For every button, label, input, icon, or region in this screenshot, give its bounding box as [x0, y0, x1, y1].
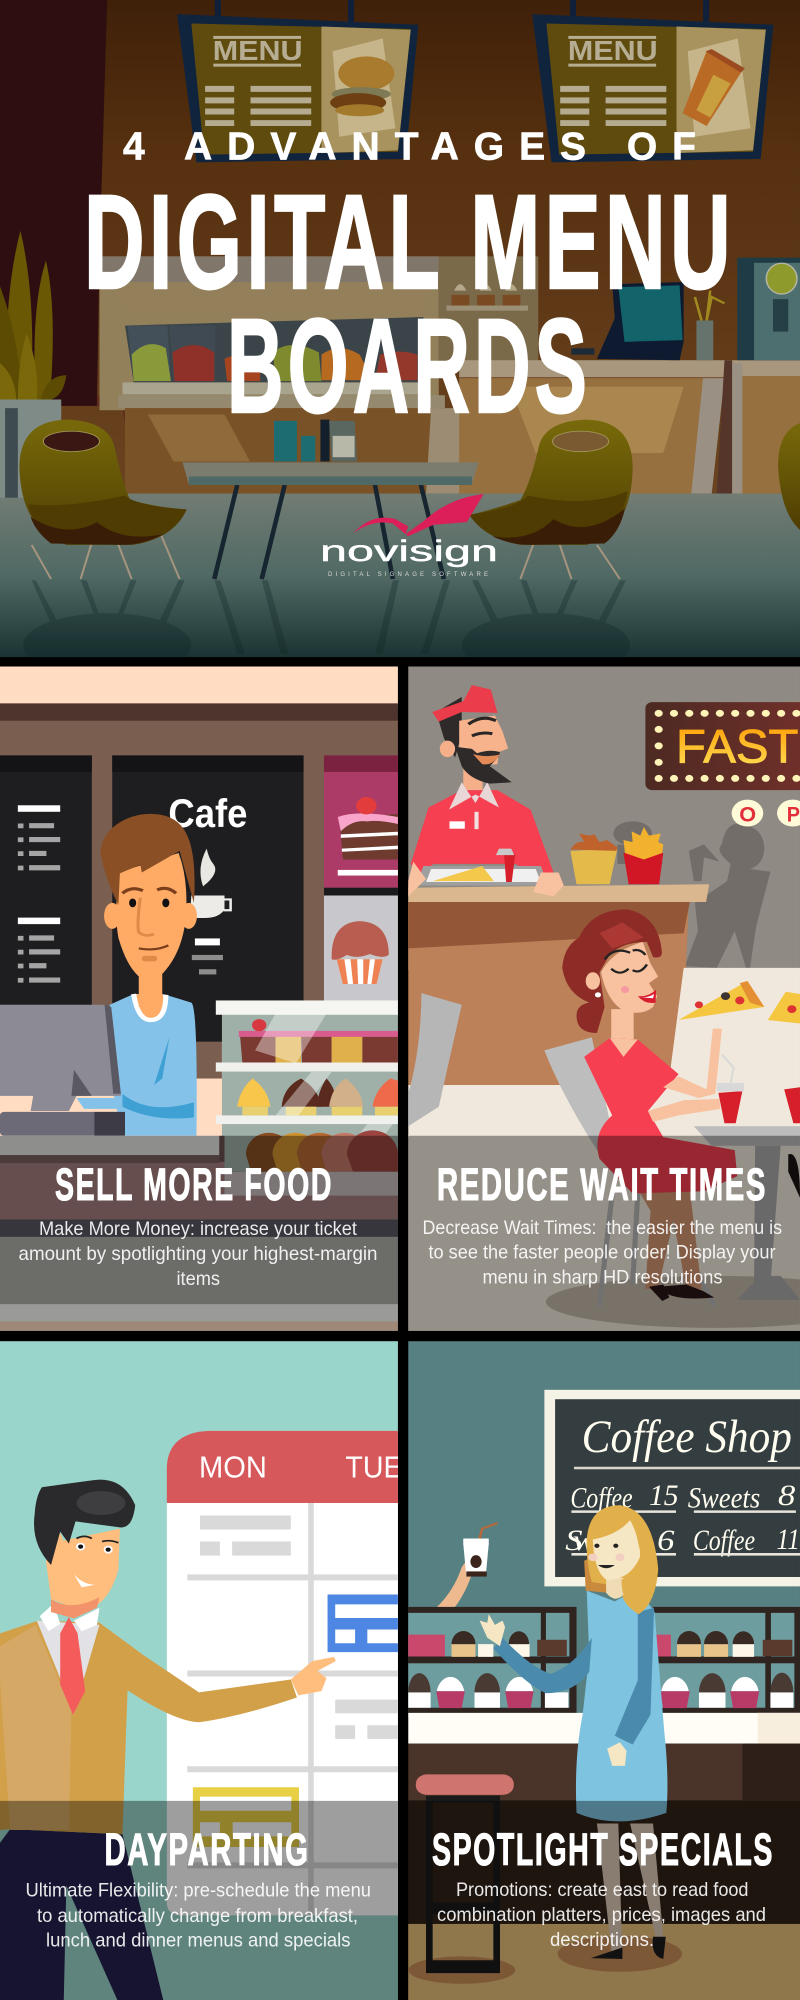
panel 4 body text: Promotions: create east to read food — [456, 1879, 748, 1901]
panel 4 wall — [408, 1341, 800, 1717]
panel 3 text backdrop — [0, 1801, 398, 2000]
panel: spotlight specials — [408, 1341, 800, 2000]
hero drink machine — [737, 258, 800, 360]
panel: dayparting — [0, 1341, 403, 2000]
panel 3 calendar — [167, 1431, 403, 1915]
panel 2 text backdrop — [408, 1136, 800, 1331]
panel 2 chair — [544, 1037, 714, 1306]
panel 3 background — [0, 1341, 398, 2000]
panel 1 left chalkboard — [0, 755, 92, 1007]
panel: sell more food — [0, 667, 398, 1332]
panel 2 chicken bucket — [570, 833, 617, 884]
panel 4 coffee shop chalkboard: Coffee — [570, 1481, 633, 1514]
panel 1 center chalkboard — [112, 755, 304, 1042]
panel 4 counter — [408, 1713, 800, 2000]
panel 2 dining floor and table — [408, 968, 800, 1332]
panel 2 pizza slices — [679, 981, 800, 1023]
hero plant — [0, 231, 66, 498]
panel 4 coffee shop chalkboard: 8 — [778, 1479, 795, 1512]
panel 2 rear chair — [408, 993, 462, 1126]
hero right chair — [469, 420, 633, 579]
hero table — [183, 420, 479, 579]
panel 2 body text: to see the faster people order! Display your — [428, 1242, 776, 1264]
hero floor reflection — [24, 580, 630, 644]
panel 4 coffee shop chalkboard: Sw — [565, 1524, 597, 1556]
panel 4 coffee shop chalkboard: 15 — [649, 1479, 679, 1512]
hero menu board left — [177, 0, 418, 162]
panel 3 calendar: TUE — [345, 1450, 403, 1485]
hero subtitle: 4 ADVANTAGES OF — [123, 126, 696, 168]
panel 1 muffins row — [246, 1130, 398, 1172]
panel: reduce wait times — [408, 667, 800, 1332]
panel 1 body text: amount by spotlighting your highest-margin — [18, 1243, 378, 1265]
panel 3 heading: DAYPARTING — [104, 1824, 310, 1875]
panel 2 silhouette diners — [613, 821, 770, 968]
panel 1 ceiling and beam — [0, 667, 398, 1137]
hero logo wing — [353, 494, 484, 536]
panel 3 body text: Ultimate Flexibility: pre-schedule the menu — [26, 1880, 371, 1902]
panel 1 cashier — [77, 814, 197, 1136]
hero far right chair — [778, 423, 800, 530]
hero straws and cup — [695, 291, 724, 360]
panel 3 body text: to automatically change from breakfast, — [37, 1905, 358, 1927]
hero menu board left: MENU — [213, 37, 303, 67]
panel 1 body text — [18, 1218, 378, 1290]
panel 2 fast sign — [645, 702, 800, 827]
panel 4 text backdrop — [408, 1801, 800, 2000]
panel 2 body text — [422, 1217, 782, 1288]
hero wall — [0, 0, 800, 496]
panel 1 point of sale terminal — [0, 1005, 125, 1136]
hero counter — [97, 256, 538, 494]
panel 1 heading: SELL MORE FOOD — [55, 1159, 333, 1210]
panel 2 woman — [562, 909, 744, 1301]
panel 2 tray — [408, 849, 564, 896]
panel 4 coffee shop chalkboard — [544, 1390, 800, 1586]
panel 4 body text — [437, 1879, 766, 1951]
panel 1 body text: items — [176, 1268, 220, 1290]
hero register monitor — [571, 282, 684, 360]
hero panel: restaurant interior — [0, 0, 800, 677]
panel 3 body text: lunch and dinner menus and specials — [46, 1930, 351, 1952]
panel 3 body text — [26, 1880, 371, 1952]
hero menu board right: MENU — [568, 37, 658, 67]
panel 2 floor shadow — [546, 1276, 800, 1328]
panel 4 pastry display — [408, 1607, 800, 1714]
hero dark brick column — [0, 0, 107, 406]
panel 1 counter — [0, 1136, 398, 1332]
hero floor — [0, 494, 800, 658]
panel 1 center chalkboard: Cafe — [168, 792, 247, 836]
panel 4 coffee shop chalkboard: Sweets — [688, 1481, 760, 1514]
panel 2 cashier — [411, 685, 554, 875]
panel 2 fries — [623, 827, 663, 884]
panel 2 body text: menu in sharp HD resolutions — [482, 1266, 723, 1288]
logo tagline: DIGITAL SIGNAGE SOFTWARE — [328, 572, 488, 578]
panel 4 barista arm with coffee cup — [436, 1523, 497, 1614]
panel 4 stool — [408, 1774, 515, 1984]
hero right counter — [459, 360, 800, 494]
panel 1 muffin poster — [332, 921, 389, 984]
panel 1 body text: Make More Money: increase your ticket — [39, 1218, 358, 1240]
panel 4 woman — [480, 1505, 682, 1972]
panel 2 second cup — [784, 1087, 800, 1123]
panel 3 calendar: MON — [199, 1450, 267, 1485]
panel 4 coffee shop chalkboard: 6 — [657, 1524, 674, 1556]
panel 1 pastry case — [216, 1000, 398, 1172]
panel 3 businessman — [0, 1480, 336, 2000]
hero left chair — [19, 420, 187, 579]
panel 2 wall — [408, 667, 800, 970]
logo wordmark: novisign — [320, 535, 498, 568]
panel 1 cake poster — [324, 755, 398, 1002]
panel 2 counter — [408, 884, 709, 1085]
panel 4 coffee shop chalkboard: Coffee — [693, 1524, 755, 1556]
hero menu board right — [532, 0, 773, 162]
panel 2 fast sign: O — [739, 803, 756, 827]
panel 2 table — [694, 1126, 800, 1300]
panel 4 body text: descriptions. — [550, 1929, 654, 1951]
panel 4 body text: combination platters, prices, images and — [437, 1904, 766, 1926]
panel 1 text backdrop — [0, 1136, 398, 1331]
